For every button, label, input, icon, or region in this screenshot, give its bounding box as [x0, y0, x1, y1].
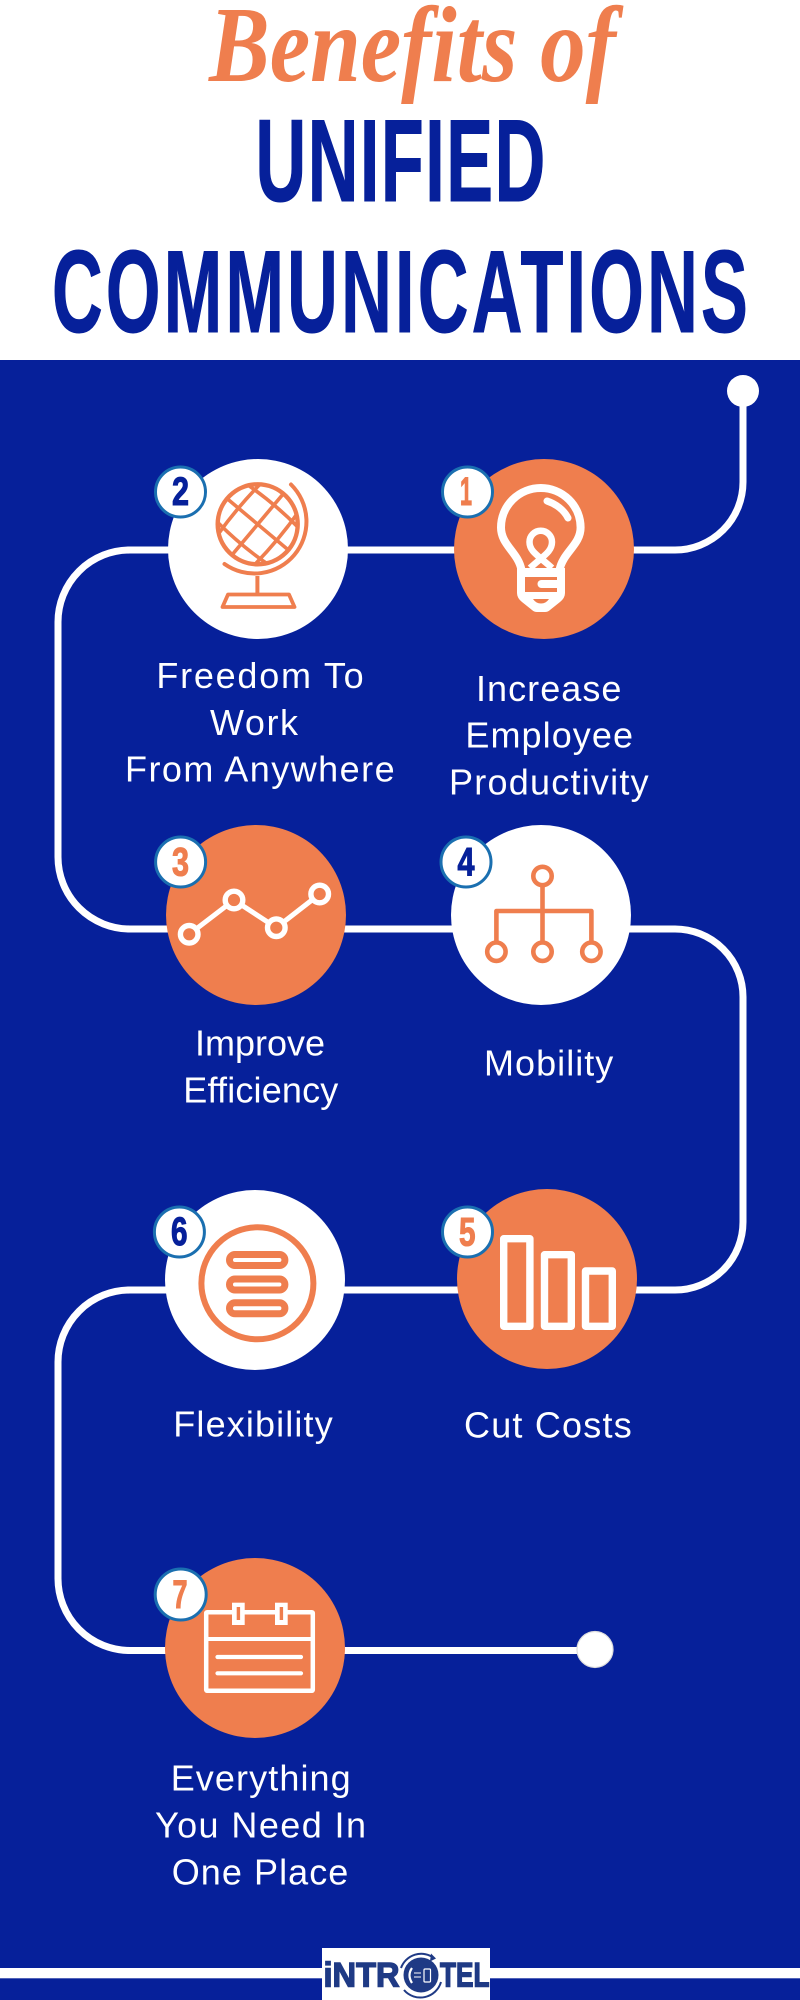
logo: Introtel: O: [410, 1957, 430, 1995]
circle: [451, 825, 631, 1005]
label: Work: [210, 702, 299, 743]
badge 2: 2: [172, 470, 189, 514]
icon: ring with stacked bars: [201, 1227, 313, 1339]
badge 5: 5: [459, 1211, 476, 1255]
circle: [166, 825, 346, 1005]
logo: Introtel: iNTR: [324, 1957, 400, 1995]
label: Productivity: [449, 761, 649, 802]
step 3: improve efficiency: [156, 825, 346, 1110]
step 5: cut costs: [442, 1189, 637, 1446]
label: One Place: [172, 1851, 348, 1892]
badge 7: 7: [172, 1573, 188, 1617]
label: Increase: [476, 668, 621, 709]
badge 6: [154, 1207, 204, 1257]
label: Everything: [171, 1758, 351, 1799]
label: You Need In: [155, 1805, 366, 1846]
title line: communications: COMMUNICATIONS: [52, 228, 751, 357]
badge 1: 1: [460, 470, 472, 514]
footer line right: [490, 1968, 800, 1978]
step 6: flexibility: [154, 1190, 345, 1445]
label: [449, 668, 649, 802]
icon: globe: [216, 482, 308, 609]
icon: line chart: [180, 885, 329, 943]
step 1: increase employee productivity: [442, 459, 649, 802]
timeline path: [58, 391, 743, 1650]
badge 2: [156, 467, 206, 517]
title: [52, 0, 751, 357]
badge 4: 4: [458, 841, 475, 885]
label: Freedom To: [156, 655, 364, 696]
circle: [165, 1558, 345, 1738]
label: Employee: [465, 715, 633, 756]
circle: [454, 459, 634, 639]
label: Improve: [195, 1023, 325, 1064]
logo: Introtel: TEL: [440, 1957, 490, 1995]
label: Efficiency: [183, 1069, 338, 1110]
step 7: everything you need in one place: [155, 1558, 366, 1892]
badge 1: [442, 467, 492, 517]
footer line left: [0, 1968, 322, 1978]
label: Flexibility: [173, 1404, 333, 1445]
label: [183, 1023, 338, 1110]
panel: white header: [0, 0, 800, 360]
badge 4: [441, 837, 491, 887]
label: Mobility: [484, 1043, 613, 1084]
step 2: freedom to work from anywhere: [125, 449, 395, 790]
circle: [457, 1189, 637, 1369]
end dot: [577, 1632, 613, 1668]
label: Cut Costs: [464, 1405, 632, 1446]
badge 3: 3: [172, 841, 189, 885]
circle: [165, 1190, 345, 1370]
badge 3: [156, 837, 206, 887]
label: [155, 1758, 366, 1892]
icon: org tree: [487, 867, 601, 961]
badge 5: [442, 1207, 492, 1257]
icon: calendar: [206, 1603, 313, 1691]
icon: light bulb: [501, 488, 581, 612]
label: From Anywhere: [125, 749, 395, 790]
circle: [168, 459, 348, 639]
logo: Introtel: [322, 1948, 490, 2000]
badge 7: [155, 1569, 206, 1620]
label: [125, 655, 395, 790]
step 4: mobility: [441, 825, 631, 1084]
title line: unified: UNIFIED: [256, 97, 547, 226]
badge 6: 6: [171, 1210, 188, 1254]
start dot: [727, 375, 759, 407]
icon: descending bars: [504, 1239, 612, 1326]
